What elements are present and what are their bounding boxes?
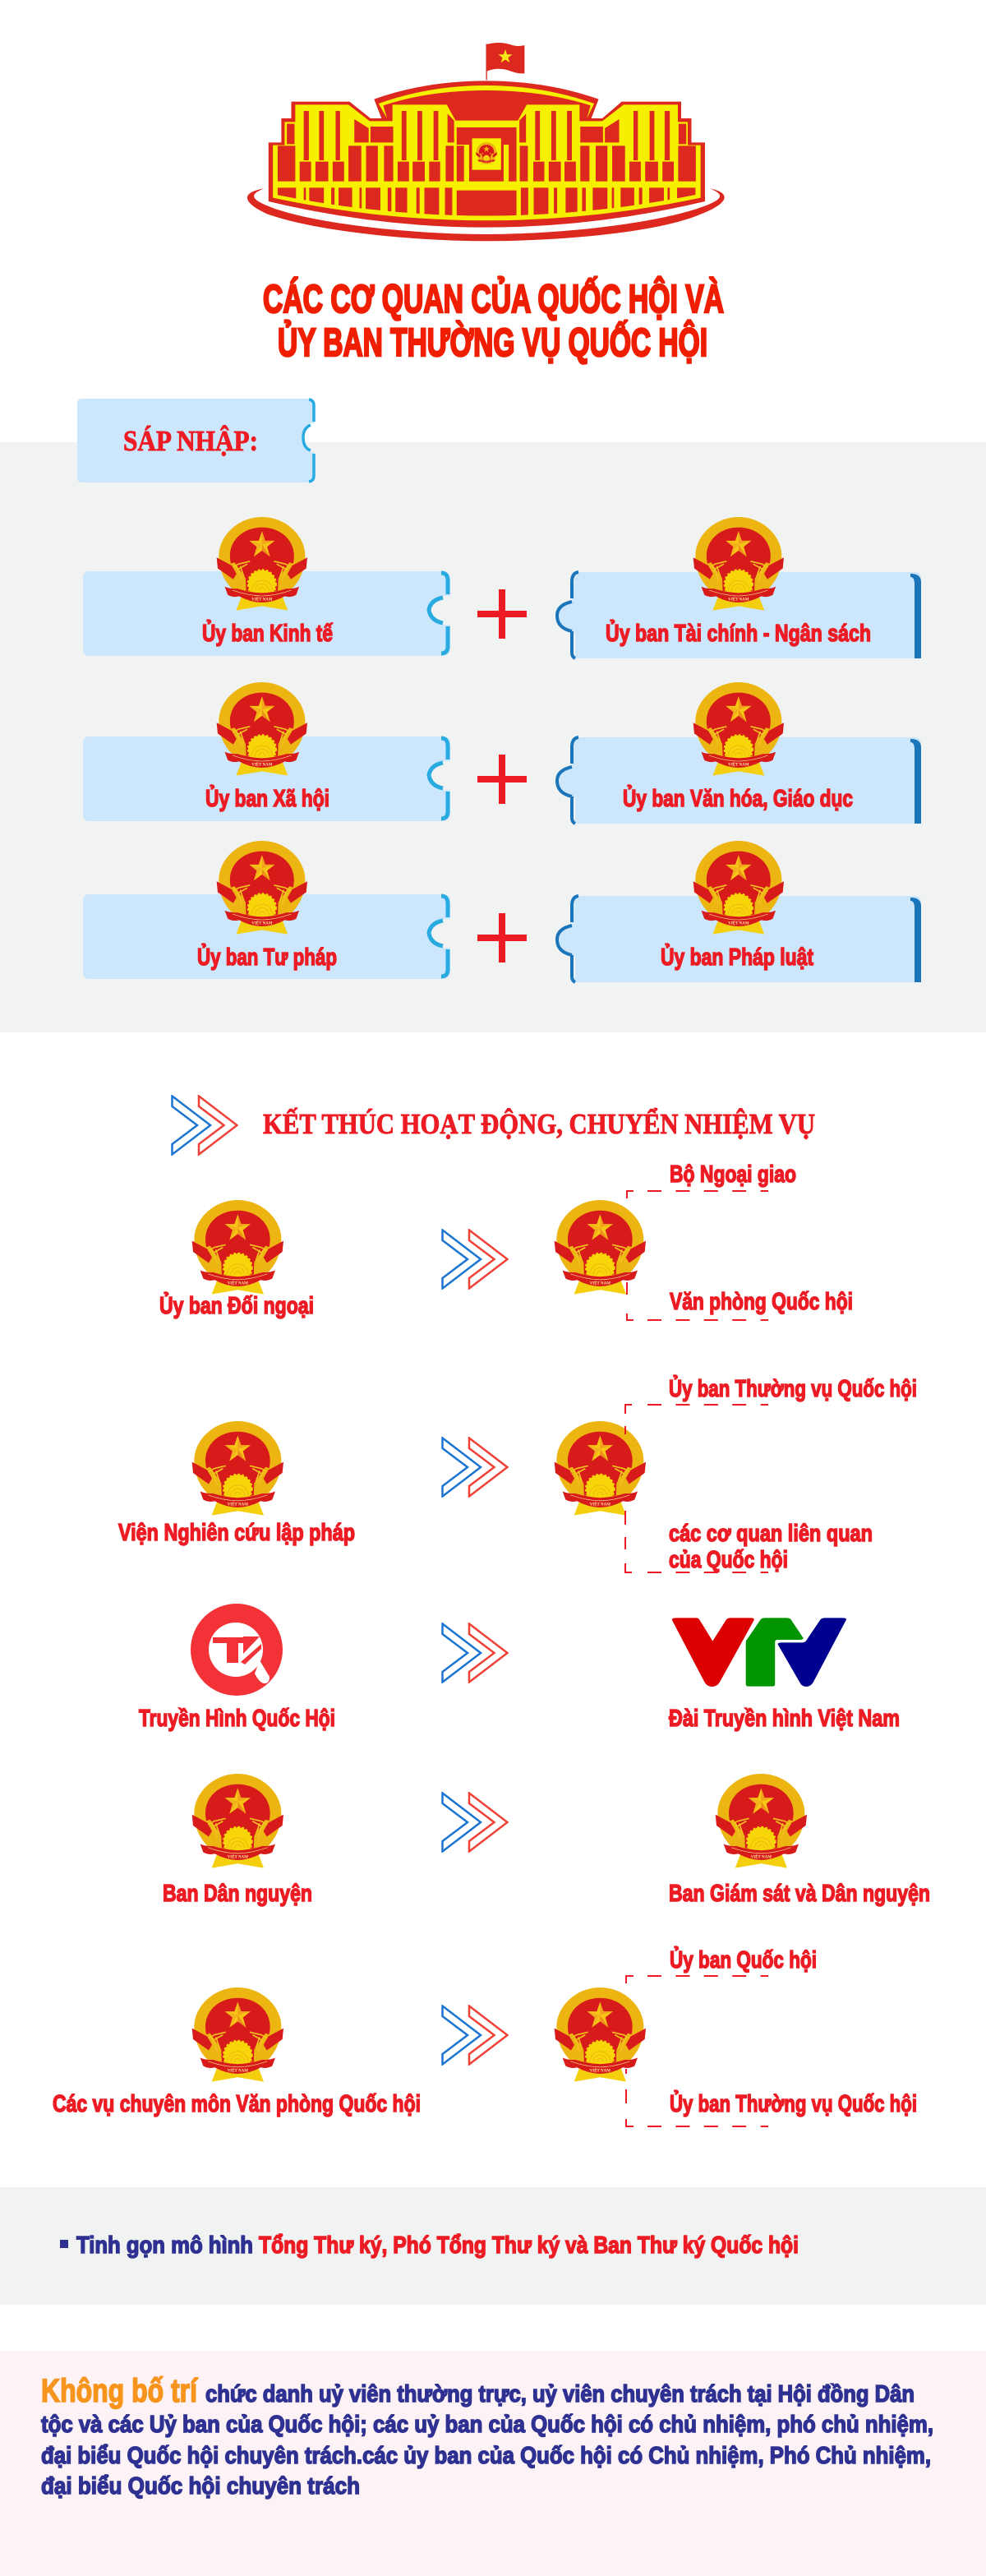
panel: Ủy ban Kinh tế (83, 571, 450, 656)
target: Ủy ban Thường vụ Quốc hội: Ủy ban Thường vụ Quốc hội (670, 2089, 917, 2117)
merge row 2 (83, 682, 921, 824)
bracket (627, 1191, 768, 1320)
transfer row: Ban Dân nguyện (163, 1774, 930, 1907)
target: Văn phòng Quốc hội: Văn phòng Quốc hội (670, 1289, 853, 1315)
note text (76, 2232, 799, 2259)
center small emblem (476, 142, 497, 165)
label: Viện Nghiên cứu lập pháp (118, 1520, 355, 1546)
icon: emblem (217, 841, 307, 935)
arrow (442, 2006, 508, 2065)
icon: emblem (693, 841, 784, 935)
title (263, 276, 724, 365)
icon: VTV logo (672, 1618, 846, 1687)
bracket (625, 1405, 768, 1572)
arrow (442, 1794, 508, 1851)
note text: Tinh gọn mô hình (76, 2232, 253, 2259)
icon: plus (477, 755, 527, 804)
panel: Ủy ban Tài chính - Ngân sách: Ủy ban Tài chính - Ngân sách (606, 619, 871, 647)
background: gray merge band (0, 442, 986, 1032)
bullet (60, 2240, 68, 2248)
panel: Ủy ban Pháp luật (555, 896, 921, 982)
arrow (442, 1230, 508, 1289)
arrow (442, 1438, 508, 1496)
panel: not arranged note (0, 2351, 986, 2576)
panel: Ủy ban Pháp luật: Ủy ban Pháp luật (661, 943, 813, 971)
building drawing (247, 81, 725, 241)
target: các cơ quan liên quan của Quốc hội: của Quốc hội (669, 1547, 788, 1573)
target label: Đài Truyền hình Việt Nam (669, 1706, 900, 1732)
icon: emblem (192, 1774, 283, 1868)
transfer row: Ủy ban Đối ngoại (159, 1161, 853, 1320)
target: các cơ quan liên quan của Quốc hội: các cơ quan liên quan (669, 1521, 873, 1547)
icon: emblem (192, 1421, 283, 1516)
merge row 1 (83, 517, 921, 658)
panel: Ủy ban Văn hóa, Giáo dục: Ủy ban Văn hóa, Giáo dục (623, 784, 853, 812)
icon: plus (477, 913, 527, 963)
target: Ủy ban Thường vụ Quốc hội: Ủy ban Thường vụ Quốc hội (669, 1374, 917, 1402)
merge row 3 (83, 841, 921, 982)
icon: plus (477, 589, 527, 639)
icon: emblem (716, 1774, 807, 1868)
bracket (626, 1976, 768, 2126)
label: Ban Dân nguyện (163, 1881, 312, 1907)
icon: TK logo (191, 1604, 283, 1696)
target: Bộ Ngoại giao: Bộ Ngoại giao (670, 1161, 796, 1188)
note body text: chức danh uỷ viên thường trực, uỷ viên chuyên trách tại Hội đồng Dân (205, 2381, 915, 2407)
panel: merge heading tag (77, 399, 315, 482)
icon: emblem (555, 1200, 646, 1295)
panel: Ủy ban Xã hội (83, 736, 450, 821)
label: Truyền Hình Quốc Hội (139, 1706, 335, 1732)
panel: Ủy ban Xã hội: Ủy ban Xã hội (205, 784, 329, 812)
icon: double chevron (173, 1096, 237, 1154)
title: ỦY BAN THƯỜNG VỤ QUỐC HỘI (278, 320, 707, 365)
icon: emblem (192, 1200, 283, 1295)
note body text (41, 2381, 933, 2500)
panel: Ủy ban Kinh tế: Ủy ban Kinh tế (202, 619, 334, 647)
icon: emblem (693, 682, 784, 776)
transfer row: Truyền Hình Quốc Hội (139, 1604, 900, 1732)
flag (486, 43, 524, 80)
panel: Ủy ban Tư pháp (83, 894, 450, 979)
panel: Ủy ban Tư pháp: Ủy ban Tư pháp (197, 943, 337, 971)
icon: emblem (555, 1987, 646, 2082)
icon: emblem (555, 1421, 646, 1516)
note text: Tổng Thư ký, Phó Tổng Thư ký và Ban Thư ký Quốc hội (259, 2232, 799, 2259)
icon: National Assembly building with flag (247, 43, 725, 241)
label: Các vụ chuyên môn Văn phòng Quốc hội (53, 2091, 421, 2117)
transfer row: Các vụ chuyên môn (53, 1946, 917, 2126)
section heading with chevrons (173, 1096, 815, 1154)
highlight: Không bố trí: Không bố trí (41, 2373, 199, 2409)
target: các cơ quan liên quan của Quốc hội (669, 1521, 873, 1573)
panel: Ủy ban Tài chính - Ngân sách (555, 572, 921, 658)
panel: Ủy ban Văn hóa, Giáo dục (555, 737, 921, 824)
title: CÁC CƠ QUAN CỦA QUỐC HỘI VÀ (263, 276, 724, 321)
panel: streamlining note (0, 2187, 986, 2305)
icon: emblem (217, 682, 307, 776)
note body text: đại biểu Quốc hội chuyên trách (41, 2473, 360, 2500)
icon: emblem (217, 517, 307, 611)
arrow (442, 1624, 508, 1682)
heading: merge: SÁP NHẬP: (123, 424, 258, 457)
heading: end of operation: KẾT THÚC HOẠT ĐỘNG, CHUYỂN NHIỆM VỤ (263, 1107, 815, 1140)
icon: emblem (192, 1987, 283, 2082)
target: Ủy ban Quốc hội: Ủy ban Quốc hội (670, 1946, 817, 1974)
label: Ủy ban Đối ngoại (159, 1291, 314, 1319)
transfer row: Viện Nghiên cứu lập pháp (118, 1374, 917, 1573)
icon: emblem (693, 517, 784, 611)
